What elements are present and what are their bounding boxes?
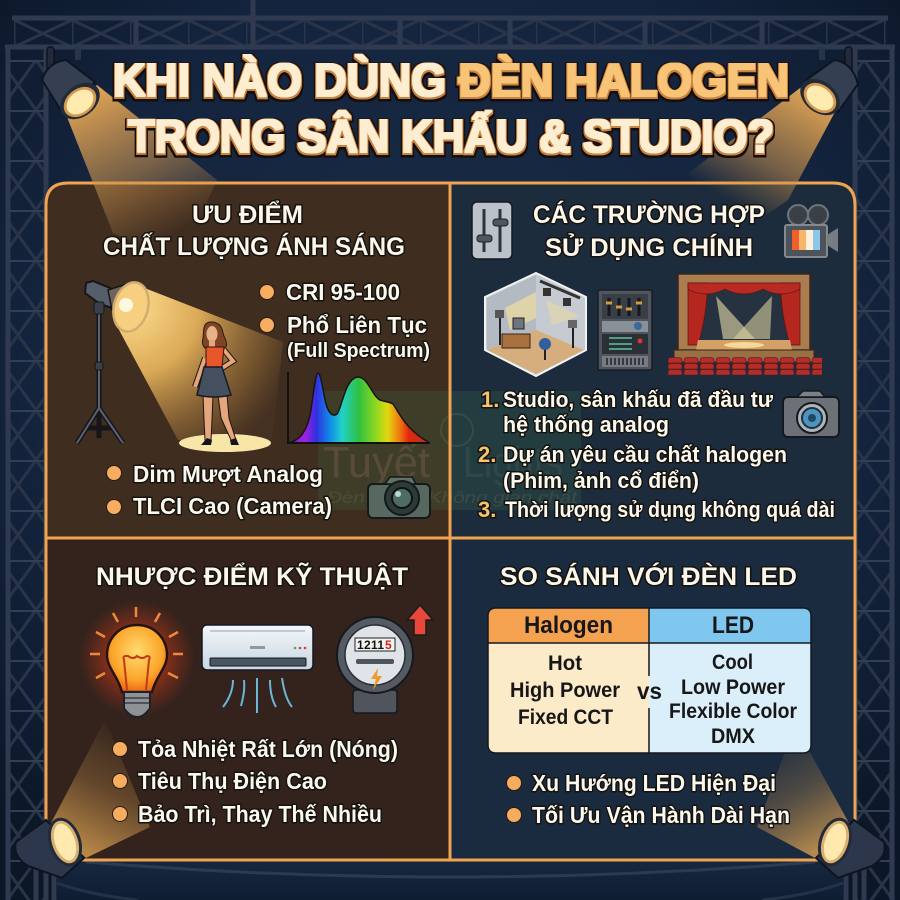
- icon: camera: [368, 477, 430, 518]
- heading: SO SÁNH VỚI ĐÈN LED: [500, 561, 797, 591]
- comparison table: vs: [637, 678, 662, 704]
- icon: camera: [783, 391, 839, 437]
- spotlight on floor: [179, 434, 271, 452]
- bullet: power: Tiêu Thụ Điện Cao: [138, 768, 327, 794]
- bullet: LED trend: Xu Hướng LED Hiện Đại: [532, 770, 776, 796]
- comparison table: Fixed CCT: [518, 706, 613, 729]
- panel: light quality advantages: [77, 200, 430, 519]
- use case 3: 3.: [478, 497, 496, 522]
- comparison table: Cool: [712, 651, 753, 674]
- bullet: long-term operation: Tối Ưu Vận Hành Dài Hạn: [532, 802, 790, 828]
- comparison table: Low Power: [681, 676, 785, 699]
- illustration: theatre stage: [667, 274, 822, 375]
- icon: film projector: [785, 205, 838, 257]
- illustration: control rack: [598, 290, 652, 370]
- heading: NHƯỢC ĐIỂM KỸ THUẬT: [96, 561, 408, 591]
- icon: electricity meter: [337, 605, 433, 713]
- bullet: heat: Tỏa Nhiệt Rất Lớn (Nóng): [138, 736, 398, 762]
- illustration: studio room: [485, 273, 586, 376]
- bullet: full spectrum: [260, 312, 430, 362]
- comparison table: LED: [712, 612, 754, 639]
- heading: [533, 199, 765, 262]
- bullet: full spectrum: Phổ Liên Tục: [287, 312, 427, 338]
- illustration: woman: [195, 322, 239, 445]
- icon: air conditioner: [202, 625, 313, 713]
- use case 1: Studio, sân khấu đã đầu tư: [503, 387, 773, 412]
- light beams: [50, 85, 850, 858]
- studio light beam: [118, 287, 283, 440]
- comparison table: High Power: [510, 679, 620, 702]
- use case 2: Dự án yêu cầu chất halogen: [503, 442, 787, 467]
- heading: [103, 200, 405, 261]
- bullet: full spectrum: (Full Spectrum): [287, 340, 430, 362]
- icon: electricity meter: 1211: [357, 638, 384, 652]
- icon: sliders: [472, 202, 512, 259]
- watermark: Lights: [463, 438, 563, 487]
- panel backgrounds: [46, 183, 855, 860]
- comparison table: DMX: [711, 725, 755, 748]
- watermark: Đèn chất - Không gian chất: [327, 488, 579, 507]
- use case 2: [478, 442, 787, 493]
- use case 1: [481, 387, 773, 437]
- use case 3: Thời lượng sử dụng không quá dài: [505, 497, 835, 522]
- heading: ƯU ĐIỂM: [192, 200, 303, 229]
- title: [113, 54, 789, 162]
- title: KHI NÀO DÙNG ĐÈN HALOGEN: [113, 54, 789, 106]
- panel: technical drawbacks: [79, 561, 433, 827]
- comparison table: Hot: [548, 652, 582, 675]
- spotlight: bottom left: [15, 813, 88, 900]
- watermark: Tuyết: [323, 438, 430, 487]
- bullet: maintenance: Bảo Trì, Thay Thế Nhiều: [138, 801, 382, 827]
- stage floor: [57, 860, 843, 900]
- panel: main use cases: [472, 199, 839, 522]
- comparison table: Halogen: [524, 612, 613, 639]
- use case 1: hệ thống analog: [503, 412, 669, 437]
- watermark: [318, 391, 581, 510]
- spotlight: top right: [793, 47, 858, 123]
- icon: studio light on tripod: [77, 278, 154, 443]
- icon: electricity meter: 5: [385, 638, 392, 652]
- spotlight: top left: [42, 47, 107, 127]
- heading: SỬ DỤNG CHÍNH: [545, 232, 753, 262]
- heading: CÁC TRƯỜNG HỢP: [533, 199, 765, 229]
- use case 2: (Phim, ảnh cổ điển): [503, 468, 699, 493]
- spotlight: bottom right: [812, 813, 885, 900]
- comparison table: Flexible Color: [669, 700, 797, 723]
- use case 1: 1.: [481, 387, 499, 412]
- panel frame: [46, 183, 855, 860]
- panel: comparison with LED: [488, 561, 811, 828]
- spectrum chart: [288, 372, 430, 443]
- title: TRONG SÂN KHẤU & STUDIO?: [128, 110, 774, 162]
- bullet: TLCI: TLCI Cao (Camera): [133, 493, 332, 519]
- use case 2: 2.: [478, 442, 496, 467]
- bullet: CRI: CRI 95-100: [286, 279, 400, 305]
- comparison table: [488, 608, 811, 753]
- bullet: dim: Dim Mượt Analog: [133, 461, 323, 487]
- heading: CHẤT LƯỢNG ÁNH SÁNG: [103, 232, 405, 261]
- icon: hot bulb: [79, 600, 195, 717]
